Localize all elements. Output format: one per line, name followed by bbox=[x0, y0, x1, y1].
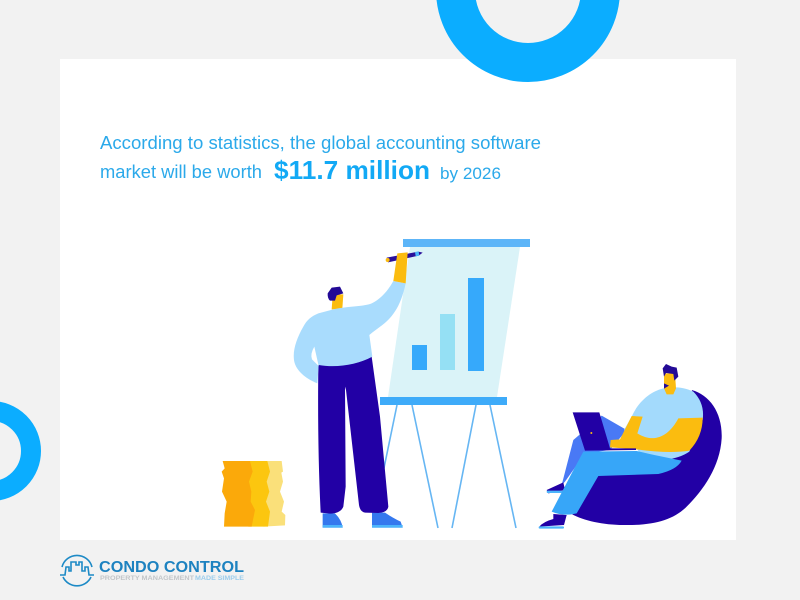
chart: easel with bar chart bbox=[380, 239, 530, 528]
heading text: According to statistics, the global accounting software bbox=[100, 133, 541, 153]
front foot bbox=[539, 514, 567, 527]
trousers bbox=[318, 357, 388, 514]
shoes bbox=[323, 513, 343, 528]
heading text bbox=[100, 133, 541, 185]
icon: coin stacks bbox=[222, 461, 285, 527]
beanbag bbox=[572, 390, 722, 525]
rear leg bbox=[562, 416, 627, 485]
hair bbox=[328, 287, 343, 301]
icon: building in circular arrows bbox=[60, 555, 94, 586]
logo: Condo Control: PROPERTY MANAGEMENT bbox=[100, 575, 194, 582]
laptop bbox=[573, 412, 636, 451]
figure: standing man bbox=[294, 251, 423, 528]
decorative ring: top bbox=[456, 0, 600, 62]
arms bbox=[610, 416, 703, 452]
heading text: market will be worth bbox=[100, 162, 262, 182]
hand and forearm bbox=[393, 252, 408, 283]
sweater bbox=[294, 281, 406, 383]
neck and face bbox=[332, 294, 343, 309]
hair bbox=[663, 364, 678, 381]
heading text: by 2026 bbox=[440, 164, 501, 183]
torso bbox=[624, 387, 703, 460]
front leg bbox=[552, 451, 682, 515]
face and neck bbox=[664, 373, 676, 394]
heading text: $11.7 million bbox=[274, 155, 430, 185]
beard bbox=[664, 383, 669, 389]
logo: Condo Control bbox=[60, 555, 245, 586]
decorative ring: left bbox=[0, 411, 31, 491]
logo: Condo Control: MADE SIMPLE bbox=[195, 575, 245, 582]
pencil bbox=[387, 252, 423, 262]
panel: white card bbox=[60, 59, 736, 540]
logo: Condo Control: CONDO CONTROL bbox=[99, 559, 244, 576]
figure: seated man on beanbag bbox=[539, 364, 722, 529]
